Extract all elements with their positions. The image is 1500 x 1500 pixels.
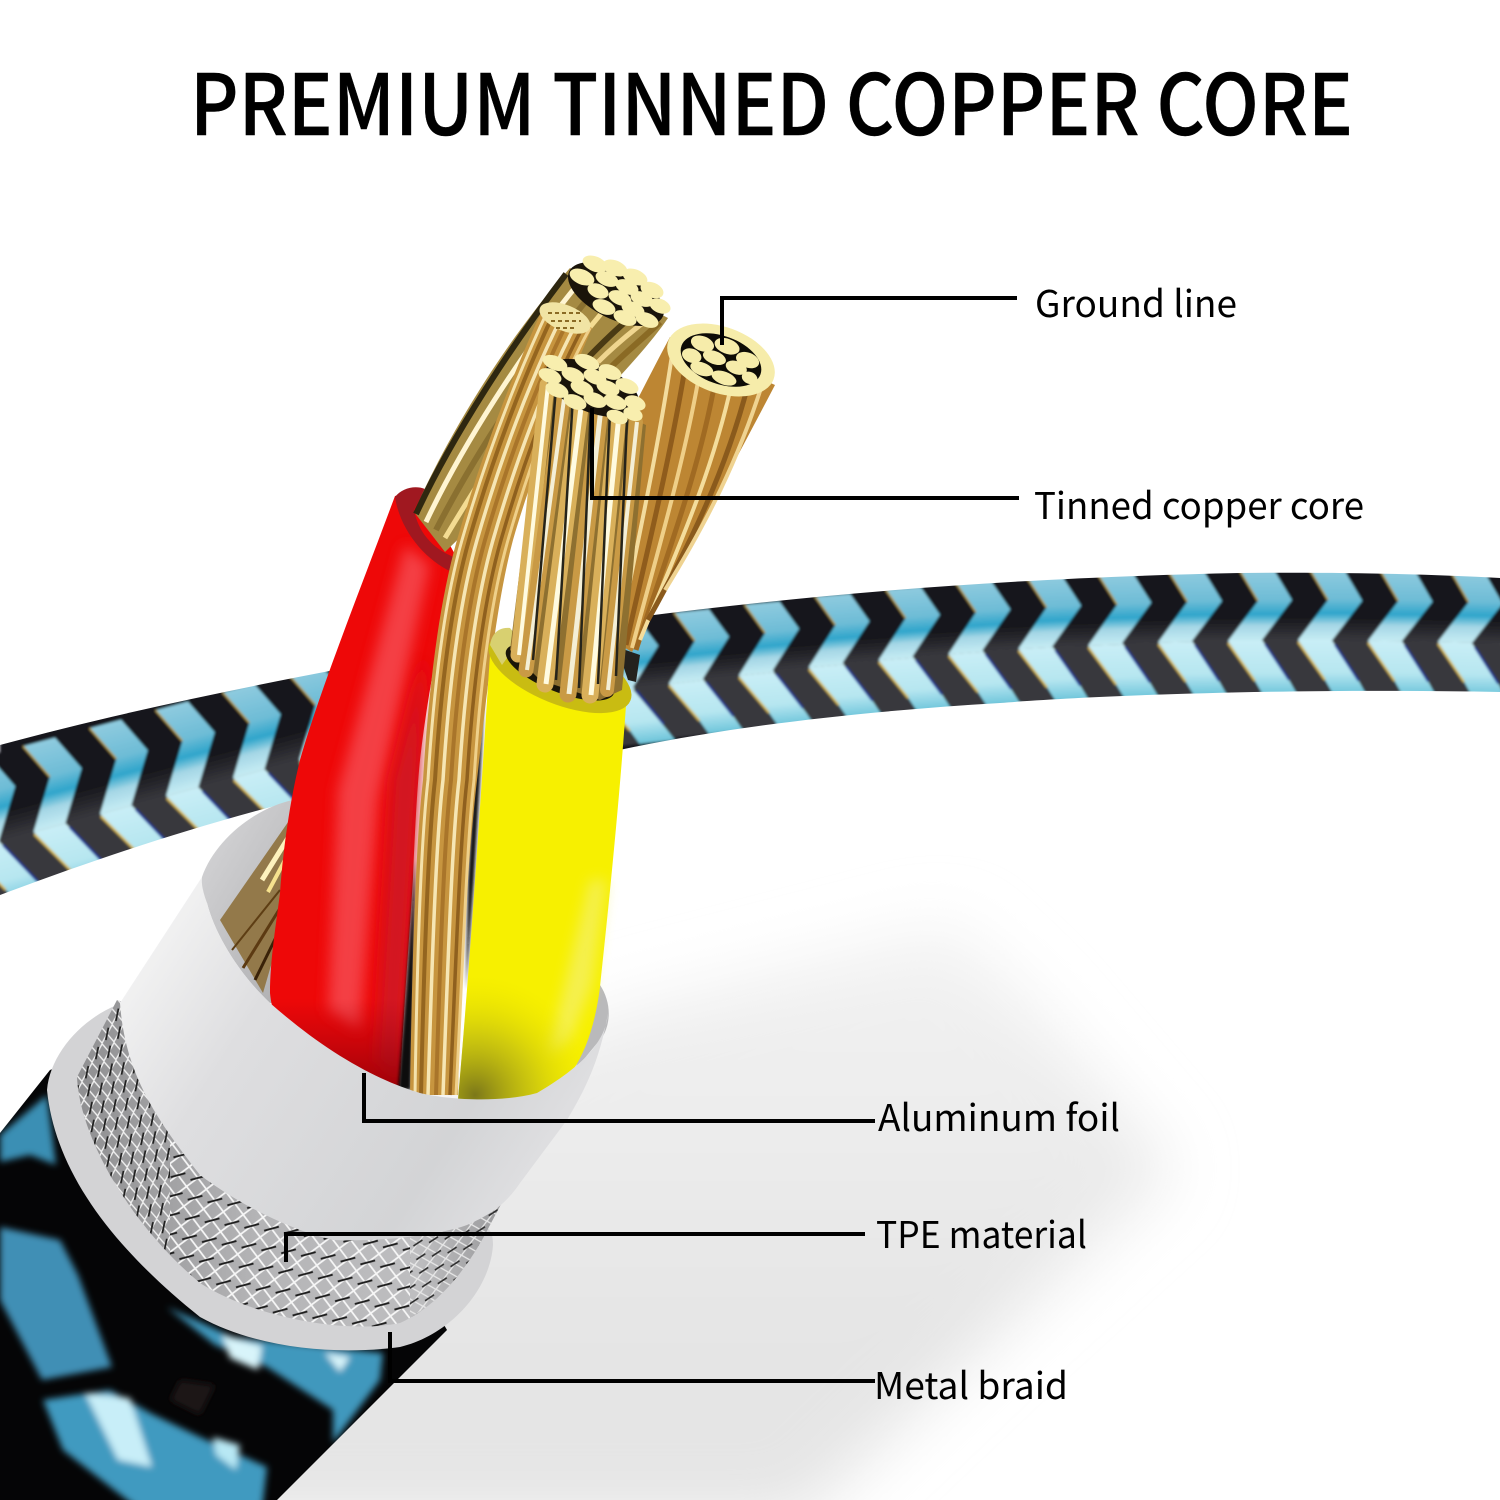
label: metal braid: Metal braid <box>874 1356 1068 1410</box>
braided cable: left section <box>0 671 330 895</box>
yellow insulated wire <box>458 614 642 1100</box>
dark wire shadow at braid junction <box>617 647 640 682</box>
ground line bundle end face <box>657 310 785 410</box>
title: PREMIUM TINNED COPPER CORE <box>190 39 1353 160</box>
centre copper bundle <box>510 380 646 700</box>
label: aluminum foil: Aluminum foil <box>878 1088 1120 1142</box>
TPE knurled band <box>77 1000 530 1327</box>
back copper bundle <box>414 268 668 552</box>
soft floor shadow <box>0 925 1175 1500</box>
label: ground line: Ground line <box>1035 274 1237 328</box>
leader line: tinned copper core <box>592 408 1019 498</box>
leader line: ground line <box>722 298 1017 345</box>
leader line: metal braid <box>390 1332 875 1381</box>
aluminum foil: inner back wall <box>201 800 609 1070</box>
dark gaps between wires <box>398 700 484 1090</box>
label: TPE material: TPE material <box>876 1205 1087 1259</box>
back bundle end face <box>558 249 674 339</box>
aluminum foil front wall <box>120 877 608 1240</box>
middle copper bundle <box>410 296 595 1095</box>
TPE flange ring <box>47 1005 493 1350</box>
right copper bundle: ground line <box>612 337 775 652</box>
red insulated wire <box>270 487 458 1088</box>
braided cable: right section <box>622 572 1500 750</box>
leader line: TPE material <box>286 1234 865 1262</box>
centre bundle end face <box>536 347 648 429</box>
label: tinned copper core: Tinned copper core <box>1034 476 1364 530</box>
braided cable: foreground section <box>0 1040 460 1500</box>
leader line: aluminum foil <box>364 1073 875 1121</box>
copper strands behind red wire <box>220 815 293 993</box>
